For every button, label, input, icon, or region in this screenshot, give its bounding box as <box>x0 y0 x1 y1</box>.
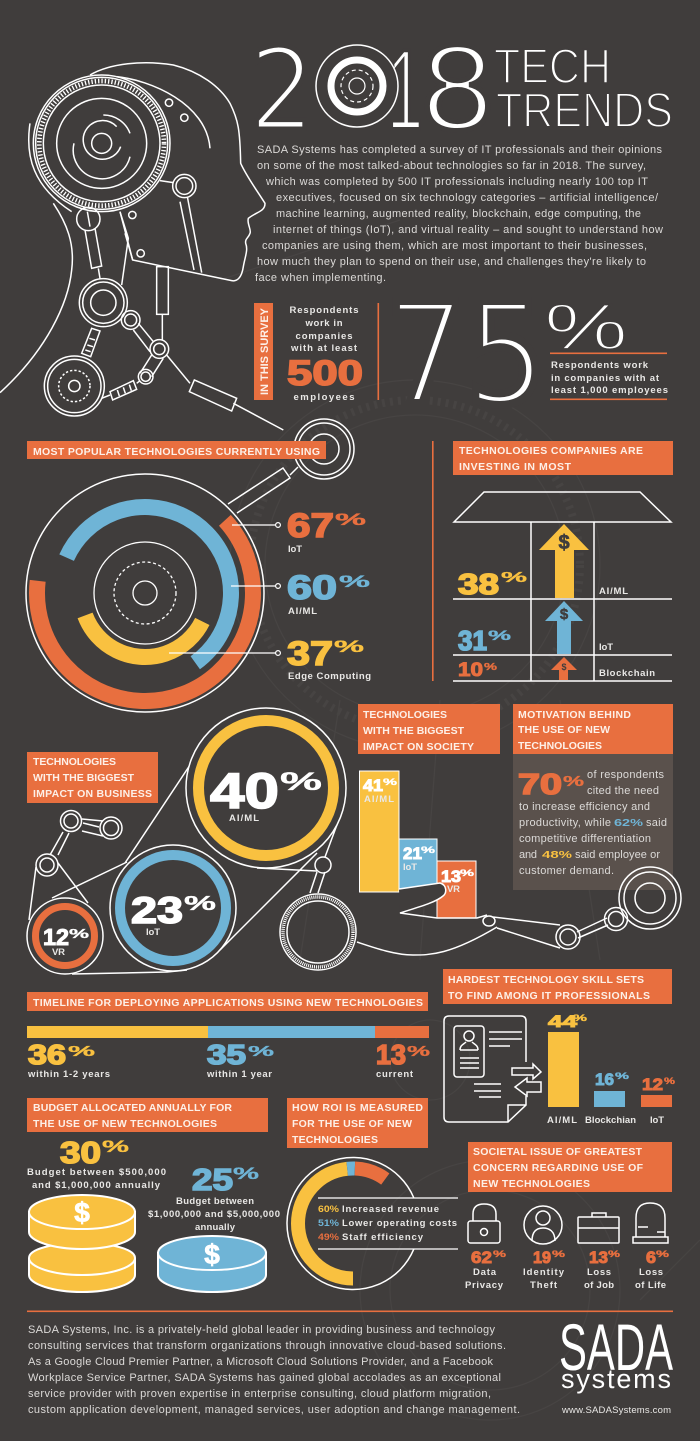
about text <box>28 1324 520 1416</box>
stacked bar <box>27 1026 429 1038</box>
title: 1 <box>387 27 423 154</box>
stat: 10 <box>458 660 655 681</box>
about text: SADA Systems, Inc. is a privately-held global leader in providing business and technology <box>28 1324 496 1336</box>
donut: IoT 23: IoT <box>146 927 160 938</box>
intro text: executives, focused on six technology categories – artificial intelligence/ <box>276 192 659 204</box>
donut: IoT 23: 23 <box>131 890 183 931</box>
heading: BUDGET ALLOCATED ANNUALLY FOR <box>33 1102 232 1114</box>
belts and joints <box>29 762 356 974</box>
stat: 30: % <box>102 1137 129 1156</box>
stat: 35 <box>206 1039 274 1080</box>
stat: 13: 13 <box>376 1039 406 1070</box>
stat: 31: % <box>488 627 512 643</box>
title: 2 <box>249 24 315 156</box>
donut: VR 12: VR <box>52 947 65 958</box>
stat: 25 <box>148 1162 280 1233</box>
stat: 36: % <box>68 1043 95 1060</box>
stat: Edge 37 <box>287 635 371 682</box>
heading: TECHNOLOGIES <box>292 1134 378 1146</box>
bar: IoT: 21 <box>403 844 422 863</box>
stat: loss of life: % <box>656 1249 669 1259</box>
donut: VR 12: % <box>69 926 90 941</box>
bar: blockchain: 16 <box>595 1070 614 1089</box>
intro text: machine learning, augmented reality, blockchain, edge computing, the <box>276 208 641 220</box>
heading <box>27 992 428 1011</box>
stat: 31: 31 <box>458 625 487 656</box>
arrow: IoT: $ <box>560 606 569 623</box>
about text: Workplace Service Partner, SADA Systems has gained global accolades as an exceptional <box>28 1372 501 1384</box>
about text: service provider with proven expertise in enterprise consulting, cloud platform migration, <box>28 1388 491 1400</box>
stat: Edge 37: 37 <box>287 635 333 673</box>
arrow: IoT <box>545 601 583 654</box>
stat: data privacy: % <box>493 1249 506 1259</box>
bar: VR: 13 <box>441 867 461 886</box>
stat: IoT 67: 67 <box>287 507 334 545</box>
logo <box>559 1310 673 1416</box>
donut: AI/ML 40 <box>186 708 346 868</box>
icon: identity <box>524 1206 562 1244</box>
stat: 75 percent: 75 <box>386 274 546 437</box>
heading: THE USE OF NEW <box>518 724 610 736</box>
legend: Lower operating costs <box>342 1218 457 1229</box>
stat: 13 <box>376 1039 430 1080</box>
stat: 75 percent: least 1,000 employees <box>551 385 668 396</box>
legend: Staff efficiency <box>342 1232 424 1243</box>
donut chart <box>267 1137 458 1310</box>
text block: 70 <box>518 769 562 801</box>
bar: AI/ML <box>547 1012 587 1126</box>
icon: title target zero <box>316 45 398 127</box>
donut: AI/ML 40: AI/ML <box>229 813 259 824</box>
stat: AI/ML 60: 60 <box>287 569 337 607</box>
heading: SOCIETAL ISSUE OF GREATEST <box>473 1146 643 1158</box>
robot hand <box>357 883 628 955</box>
stat: 31 <box>458 625 613 656</box>
icon: coin <box>158 1236 266 1292</box>
panel: most popular technologies <box>0 419 371 746</box>
arrow: blockchain: $ <box>561 662 567 672</box>
stat: 30: 30 <box>60 1135 101 1170</box>
title: TRENDS <box>496 84 673 138</box>
stat: 25: % <box>233 1164 259 1183</box>
stat: identity theft: Identity <box>523 1267 565 1278</box>
icon: coin: $ <box>204 1239 220 1270</box>
heading <box>358 704 500 754</box>
bar: VR <box>437 861 476 918</box>
heading: FOR THE USE OF NEW <box>292 1118 412 1130</box>
stat: 10: 10 <box>458 660 483 681</box>
bar: AI/ML: 41 <box>363 776 383 795</box>
panel: in this survey <box>254 303 379 403</box>
stat: 25: $1,000,000 and $5,000,000 <box>148 1209 280 1220</box>
arrow: AI/ML: $ <box>558 532 570 554</box>
stat: data privacy <box>465 1248 506 1291</box>
bar: AI/ML: % <box>573 1013 587 1023</box>
heading: THE USE OF NEW TECHNOLOGIES <box>33 1118 217 1130</box>
stat: loss of job: Loss <box>587 1267 611 1278</box>
donut: AI/ML 40: % <box>280 768 322 796</box>
bar: AI/ML <box>360 771 399 892</box>
panel: in this survey: companies <box>296 331 352 342</box>
icon: lock <box>468 1204 500 1243</box>
bar: blockchain: Blockchian <box>585 1115 636 1126</box>
stat: loss of life <box>635 1248 669 1291</box>
connector arm <box>228 419 354 513</box>
intro text: which was completed by 500 IT professionals including nearly 100 top IT <box>265 176 648 188</box>
panel: in this survey: Respondents <box>290 305 358 316</box>
heading: TECHNOLOGIES <box>518 740 602 752</box>
legend <box>318 1204 457 1243</box>
heading <box>513 704 673 754</box>
intro text: face when implementing. <box>255 272 386 284</box>
icon: coin stack <box>29 1195 135 1292</box>
stat: 30: Budget between $500,000 <box>27 1167 166 1178</box>
stat: 75 percent: in companies with at <box>551 373 660 384</box>
heading: TECHNOLOGIES <box>33 756 116 768</box>
heading <box>27 752 158 803</box>
bar: IoT <box>399 839 437 889</box>
panel: in this survey: work in <box>304 318 343 329</box>
stat: Edge 37: % <box>334 637 364 656</box>
text block: customer demand. <box>519 865 614 877</box>
about text: custom application development, managed services, user adoption and change management. <box>28 1404 520 1416</box>
heading <box>453 441 673 475</box>
intro text <box>255 144 663 284</box>
panel: biggest impact on society <box>357 704 628 955</box>
intro text: on some of the most talked-about technologies so far in 2018. The survey, <box>257 160 646 172</box>
panel: biggest impact on business <box>27 708 356 974</box>
bar: blockchain <box>585 1070 636 1126</box>
donut: AI/ML 40: 40 <box>210 763 279 819</box>
stat: 38: 38 <box>458 569 499 601</box>
text block: % <box>563 773 584 790</box>
bar: AI/ML: % <box>383 777 397 787</box>
icon: briefcase <box>578 1213 619 1243</box>
text block: to increase efficiency and <box>519 801 650 813</box>
panel: motivation <box>513 704 681 929</box>
heading: TECHNOLOGIES COMPANIES ARE <box>459 445 643 457</box>
panel: in this survey: 500 <box>287 354 363 393</box>
stat: loss of life: 6 <box>646 1248 656 1267</box>
logo: systems <box>561 1364 671 1394</box>
intro text: internet of things (IoT), and virtual reality – and sought to understand how <box>273 224 663 236</box>
donut: VR 12 <box>27 898 103 974</box>
heading: MOST POPULAR TECHNOLOGIES CURRENTLY USING <box>33 446 320 458</box>
text block: competitive differentiation <box>519 833 651 845</box>
stat: 13: % <box>407 1043 430 1060</box>
text block <box>518 769 667 877</box>
stat: 75 percent <box>386 274 668 437</box>
stat: IoT 67: % <box>335 510 366 529</box>
text block: 48% <box>542 849 573 861</box>
stat: 36 <box>27 1039 110 1080</box>
stat: data privacy: Privacy <box>465 1280 504 1291</box>
stat: loss of job: 13 <box>589 1248 608 1267</box>
heading: MOTIVATION BEHIND <box>518 709 631 721</box>
logo: www.SADASystems.com <box>561 1405 671 1416</box>
heading: INVESTING IN MOST <box>459 461 572 473</box>
building frame <box>453 492 672 681</box>
panel: technologies companies are investing in most <box>432 441 673 681</box>
arrow: AI/ML <box>539 524 589 598</box>
stat: 31: IoT <box>599 642 613 653</box>
stat: 75 percent: % <box>544 290 628 363</box>
stat: 25: annually <box>195 1222 236 1233</box>
bar: VR: % <box>460 868 474 878</box>
stat: Edge 37: Edge Computing <box>288 671 371 682</box>
heading <box>443 969 672 1004</box>
stat: data privacy: Data <box>473 1267 497 1278</box>
intro text: how much they plan to spend on their use, and challenges they're likely to <box>257 256 646 268</box>
stat: IoT 67 <box>287 507 366 555</box>
bar: IoT: IoT <box>650 1115 664 1126</box>
title <box>249 24 673 156</box>
panel: in this survey: with at least <box>290 343 358 354</box>
icon: resume <box>444 1016 541 1122</box>
arrow: blockchain <box>551 657 577 680</box>
stat: identity theft: 19 <box>533 1248 551 1267</box>
legend: 51% <box>318 1218 340 1229</box>
heading <box>287 1098 428 1148</box>
heading: TO FIND AMONG IT PROFESSIONALS <box>448 990 650 1002</box>
heading: HARDEST TECHNOLOGY SKILL SETS <box>448 974 644 986</box>
stat: loss of job: % <box>608 1249 620 1259</box>
stat: 75 percent: Respondents work <box>551 360 649 371</box>
text block: and <box>519 849 537 861</box>
stat: 38: % <box>501 569 527 586</box>
stat: 35: 35 <box>207 1039 246 1070</box>
panel: societal issue <box>465 1142 672 1291</box>
bar: blockchain: % <box>615 1071 629 1081</box>
bar: IoT: IoT <box>403 862 417 873</box>
stat: 38 <box>458 569 628 601</box>
bar: AI/ML: AI/ML <box>547 1115 577 1126</box>
bar: IoT: % <box>421 845 435 855</box>
stat: IoT 67: IoT <box>288 544 302 555</box>
stat: 38: AI/ML <box>599 586 628 597</box>
panel: timeline <box>27 992 430 1080</box>
donut: IoT 23 <box>110 845 236 971</box>
stat: loss of life: Loss <box>639 1267 663 1278</box>
bar: AI/ML: 44 <box>548 1012 578 1031</box>
stat: 30 <box>27 1135 166 1191</box>
title: TECH <box>494 40 611 94</box>
heading <box>27 1098 268 1132</box>
about text: consulting services that transform organizations through innovative cloud-based solutions. <box>28 1340 506 1352</box>
heading: WITH THE BIGGEST <box>363 725 465 737</box>
heading: IMPACT ON BUSINESS <box>33 788 152 800</box>
text block: said employee or <box>575 849 660 861</box>
stat: AI/ML 60 <box>287 569 370 617</box>
stat: 30: and $1,000,000 annually <box>32 1180 161 1191</box>
stat: loss of job: of Job <box>584 1280 614 1291</box>
stat: identity theft: % <box>552 1249 565 1259</box>
stat: identity theft: Theft <box>530 1280 558 1291</box>
stat: 10: % <box>484 662 497 673</box>
text block: cited the need <box>587 785 659 797</box>
stat: 25: 25 <box>192 1162 233 1197</box>
stat: 35: within 1 year <box>206 1069 272 1080</box>
legend: 49% <box>318 1232 340 1243</box>
donut: IoT 23: % <box>184 893 216 915</box>
intro text: companies are using them, which are most important to their businesses, <box>262 240 647 252</box>
panel: how ROI is measured <box>267 1098 458 1310</box>
bar: IoT <box>641 1075 675 1126</box>
panel: in this survey: employees <box>294 392 354 403</box>
hand joint circle <box>619 867 681 929</box>
text block: of respondents <box>587 769 664 781</box>
heading <box>468 1142 672 1192</box>
illustration: robot head <box>0 63 283 430</box>
footer <box>27 1310 673 1416</box>
bar: IoT: % <box>664 1076 675 1086</box>
icon: tombstone <box>633 1203 668 1243</box>
stat: loss of life: of Life <box>635 1280 666 1291</box>
stat: identity theft <box>523 1248 565 1291</box>
heading: TIMELINE FOR DEPLOYING APPLICATIONS USING NEW TECHNOLOGIES <box>33 997 423 1009</box>
stat: 36: 36 <box>28 1039 66 1070</box>
stat: loss of job <box>584 1248 620 1291</box>
stat: 10: Blockchain <box>599 668 655 679</box>
text block: said <box>646 817 667 829</box>
stat: AI/ML 60: AI/ML <box>288 606 317 617</box>
panel: hardest skill sets <box>443 969 675 1126</box>
bar: IoT: 12 <box>642 1075 663 1094</box>
stat: 25: Budget between <box>176 1196 254 1207</box>
text block: productivity, while <box>519 817 611 829</box>
heading <box>27 441 326 459</box>
stat: AI/ML 60: % <box>339 572 370 591</box>
heading: IMPACT ON SOCIETY <box>363 741 474 753</box>
icon: coin stack: $ <box>74 1197 90 1228</box>
stat: 35: % <box>248 1043 274 1060</box>
panel: budget <box>27 1098 280 1292</box>
bar: AI/ML: AI/ML <box>364 794 394 805</box>
stat: data privacy: 62 <box>471 1248 492 1267</box>
title: 8 <box>419 24 496 156</box>
heading: CONCERN REGARDING USE OF <box>473 1162 644 1174</box>
heading: WITH THE BIGGEST <box>33 772 135 784</box>
legend: 60% <box>318 1204 340 1215</box>
heading: HOW ROI IS MEASURED <box>292 1102 423 1114</box>
panel: in this survey: IN THIS SURVEY <box>259 307 271 395</box>
bar: VR: VR <box>447 884 460 895</box>
stat: 36: within 1-2 years <box>27 1069 110 1080</box>
text block: 62% <box>614 817 644 829</box>
heading: NEW TECHNOLOGIES <box>473 1178 590 1190</box>
radial chart <box>0 440 298 746</box>
intro text: SADA Systems has completed a survey of IT professionals and their opinions <box>257 144 662 156</box>
stat: 13: current <box>376 1069 414 1080</box>
donut: VR 12: 12 <box>43 924 69 950</box>
heading: TECHNOLOGIES <box>363 709 447 721</box>
about text: As a Google Cloud Premier Partner, a Microsoft Cloud Solutions Provider, and a Facebook <box>28 1356 494 1368</box>
legend: Increased revenue <box>342 1204 439 1215</box>
